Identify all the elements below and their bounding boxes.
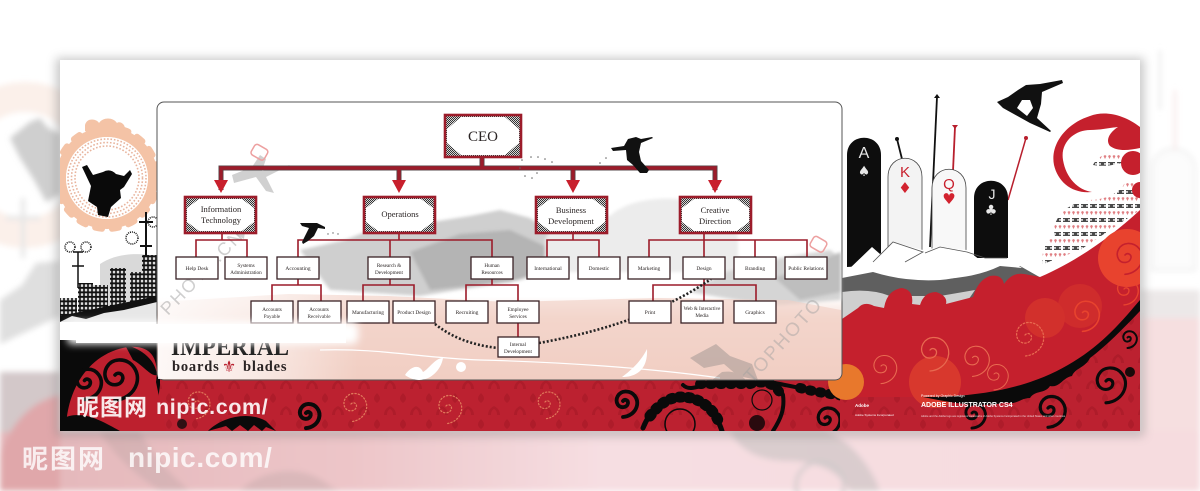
- box: Accounts Payable: Payable: [264, 314, 281, 320]
- right art: black scroll border: [923, 300, 1140, 428]
- watermark: [156, 143, 828, 387]
- box: Creative Direction: [680, 197, 751, 233]
- icon: top right snowboarder: [997, 80, 1063, 132]
- box: Web and Interactive Media: Media: [695, 313, 709, 319]
- box: Employee Services: [497, 301, 539, 323]
- box: Marketing: [628, 257, 670, 279]
- box: Branding: Branding: [745, 266, 765, 272]
- box: Employee Services: Services: [509, 314, 527, 320]
- box: Internal Development: [498, 337, 539, 357]
- box: Creative Direction: Direction: [699, 216, 732, 226]
- box: Information Technology: [185, 197, 256, 233]
- fine print on poster: ADOBE ILLUSTRATOR CS4: [921, 402, 1013, 409]
- box: Accounts Payable: [251, 301, 293, 323]
- box: Internal Development: Development: [504, 349, 533, 355]
- poles: [930, 97, 937, 247]
- box: Accounts Payable: Accounts: [262, 307, 282, 313]
- box: Human Resources: [471, 257, 513, 279]
- box: Systems Administration: Systems: [237, 263, 255, 269]
- dots behind snowboarder: [327, 156, 607, 235]
- board: king of diamonds: ♦: [898, 179, 912, 197]
- icon: circle snowboarder silhouette: [82, 165, 132, 217]
- icon: street lamp left: [65, 242, 91, 288]
- box: Research and Development: [368, 257, 410, 279]
- board: king of diamonds: K: [900, 164, 910, 181]
- box: Human Resources: Human: [484, 263, 500, 269]
- box: Print: Print: [645, 310, 656, 316]
- watermark: TOPHOTO: [740, 294, 827, 387]
- box: Human Resources: Resources: [481, 270, 503, 276]
- panel: org chart: [156, 102, 842, 387]
- watermark: PHOTO.CN: [156, 225, 248, 319]
- box: Operations: Operations: [381, 209, 419, 219]
- arrow tree: CEO to departments: [214, 157, 722, 193]
- watermark: nipic on background: nipic.com/: [128, 442, 272, 473]
- box: Accounting: Accounting: [285, 266, 311, 272]
- box: Internal Development: Internal: [510, 342, 527, 348]
- board: ace of spades: A: [859, 145, 870, 162]
- box: Information Technology: Technology: [201, 215, 242, 225]
- right art: red crescent wave: [1053, 113, 1148, 198]
- fine print on poster: Adobe: [855, 403, 869, 408]
- board: jack of clubs: ♣: [985, 203, 997, 219]
- poster background: [60, 60, 1140, 431]
- icon: street lamp right: [126, 212, 158, 256]
- logo: IMPERIAL boards blades: IMPERIAL: [171, 334, 289, 361]
- box: International: International: [534, 266, 562, 272]
- board: jack of clubs: [974, 181, 1008, 258]
- logo: IMPERIAL boards blades: ⚜: [222, 357, 236, 376]
- box: Creative Direction: Creative: [701, 205, 730, 215]
- box: Research and Development: Development: [375, 270, 404, 276]
- box: Accounts Receivable: [298, 301, 341, 323]
- icon: snowboarder over operations line: [300, 223, 325, 244]
- box: Product Design: [393, 301, 435, 323]
- box: Graphics: Graphics: [745, 310, 765, 316]
- connectors: departments to teams: [196, 233, 807, 337]
- box: Information Technology: Information: [201, 204, 242, 214]
- watermark: nipic on background: 昵图网: [22, 444, 106, 474]
- watermark: nipic on poster: nipic.com/: [156, 395, 268, 419]
- box: Print: [629, 301, 671, 323]
- board: ace of spades: ♠: [858, 164, 870, 180]
- icon: snowboarder over chart line: [611, 137, 653, 173]
- box: Systems Administration: [225, 257, 267, 279]
- board: king of diamonds: [888, 158, 922, 255]
- watermark: nipic on poster: 昵图网: [76, 394, 148, 420]
- board: queen of hearts: [932, 169, 966, 252]
- box: Research and Development: Research &: [377, 263, 401, 269]
- box: Business Development: Business: [556, 205, 586, 215]
- right art: orange swirl circles: [828, 229, 1156, 408]
- board: jack of clubs: J: [988, 186, 996, 202]
- box: Design: Design: [696, 266, 712, 272]
- logo: IMPERIAL boards blades: blades: [243, 359, 287, 375]
- red bottom strip: [60, 345, 1140, 431]
- box: CEO: [445, 115, 521, 157]
- board: ace of spades: [847, 138, 881, 267]
- right art: playing card snowboards: [847, 94, 1028, 267]
- dotted link: Internal Development to Design: [539, 279, 711, 343]
- box: Public Relations: Public Relations: [788, 266, 824, 272]
- box: Business Development: [536, 197, 607, 233]
- box: Business Development: Development: [548, 216, 595, 226]
- box: Web and Interactive Media: Web & Interactive: [684, 307, 721, 312]
- box: Domestic: Domestic: [589, 266, 610, 272]
- box: Manufacturing: Manufacturing: [352, 309, 384, 316]
- box: International: [527, 257, 569, 279]
- right art: snowy mountains: [842, 242, 1043, 322]
- logo: IMPERIAL boards blades: [171, 334, 289, 376]
- box: Help Desk: Help Desk: [186, 266, 209, 272]
- dotted link: Product Design to Internal Development: [435, 324, 498, 348]
- box: Web and Interactive Media: [681, 301, 723, 323]
- box: Accounts Receivable: Receivable: [307, 314, 331, 320]
- box: Operations: [364, 197, 435, 233]
- right art: card pattern cloud wave: [1042, 153, 1140, 264]
- left art: sun ring with silhouette: [56, 118, 158, 229]
- box: CEO: CEO: [468, 129, 498, 145]
- fine print on poster: Adobe Systems Incorporated: [855, 413, 894, 417]
- watermark: nipic on background: [22, 442, 272, 474]
- bottom left black and red swirl art: [60, 340, 560, 431]
- logo: IMPERIAL boards blades: boards: [172, 359, 220, 375]
- box: Graphics: [734, 301, 776, 323]
- watermark: nipic on poster: [76, 394, 268, 420]
- right art: big red wave: [840, 210, 1140, 431]
- box: Help Desk: [176, 257, 218, 279]
- box: Domestic: [578, 257, 620, 279]
- box: Accounts Receivable: Accounts: [309, 307, 329, 313]
- fine print on poster: Adobe and the Adobe logo are registered trademarks of Adobe Systems Incorporated in the United States and other countries: [921, 414, 1066, 418]
- box: Product Design: Product Design: [397, 310, 431, 316]
- bottom centre black scroll ornament: [614, 380, 840, 431]
- box: Systems Administration: Administration: [230, 270, 262, 276]
- box: Employee Services: Employee: [507, 307, 529, 313]
- box: Marketing: Marketing: [638, 266, 661, 272]
- box: Public Relations: [785, 257, 827, 279]
- box: Recruiting: Recruiting: [456, 310, 479, 316]
- board: queen of hearts: Q: [943, 176, 955, 193]
- left art: city skyline with lamps: [60, 212, 158, 324]
- box: Recruiting: [446, 301, 488, 323]
- box: Accounting: [277, 257, 319, 279]
- panel landscape art: [158, 199, 841, 380]
- board: queen of hearts: ♥: [942, 190, 956, 208]
- fine print on poster: [855, 394, 1066, 418]
- poster shadow: [56, 58, 1144, 436]
- fine print on poster: Powered by Graphic Design: [921, 394, 965, 398]
- white smear band: [67, 322, 358, 344]
- box: Branding: [734, 257, 776, 279]
- box: Manufacturing: [347, 301, 389, 323]
- box: Design: [683, 257, 725, 279]
